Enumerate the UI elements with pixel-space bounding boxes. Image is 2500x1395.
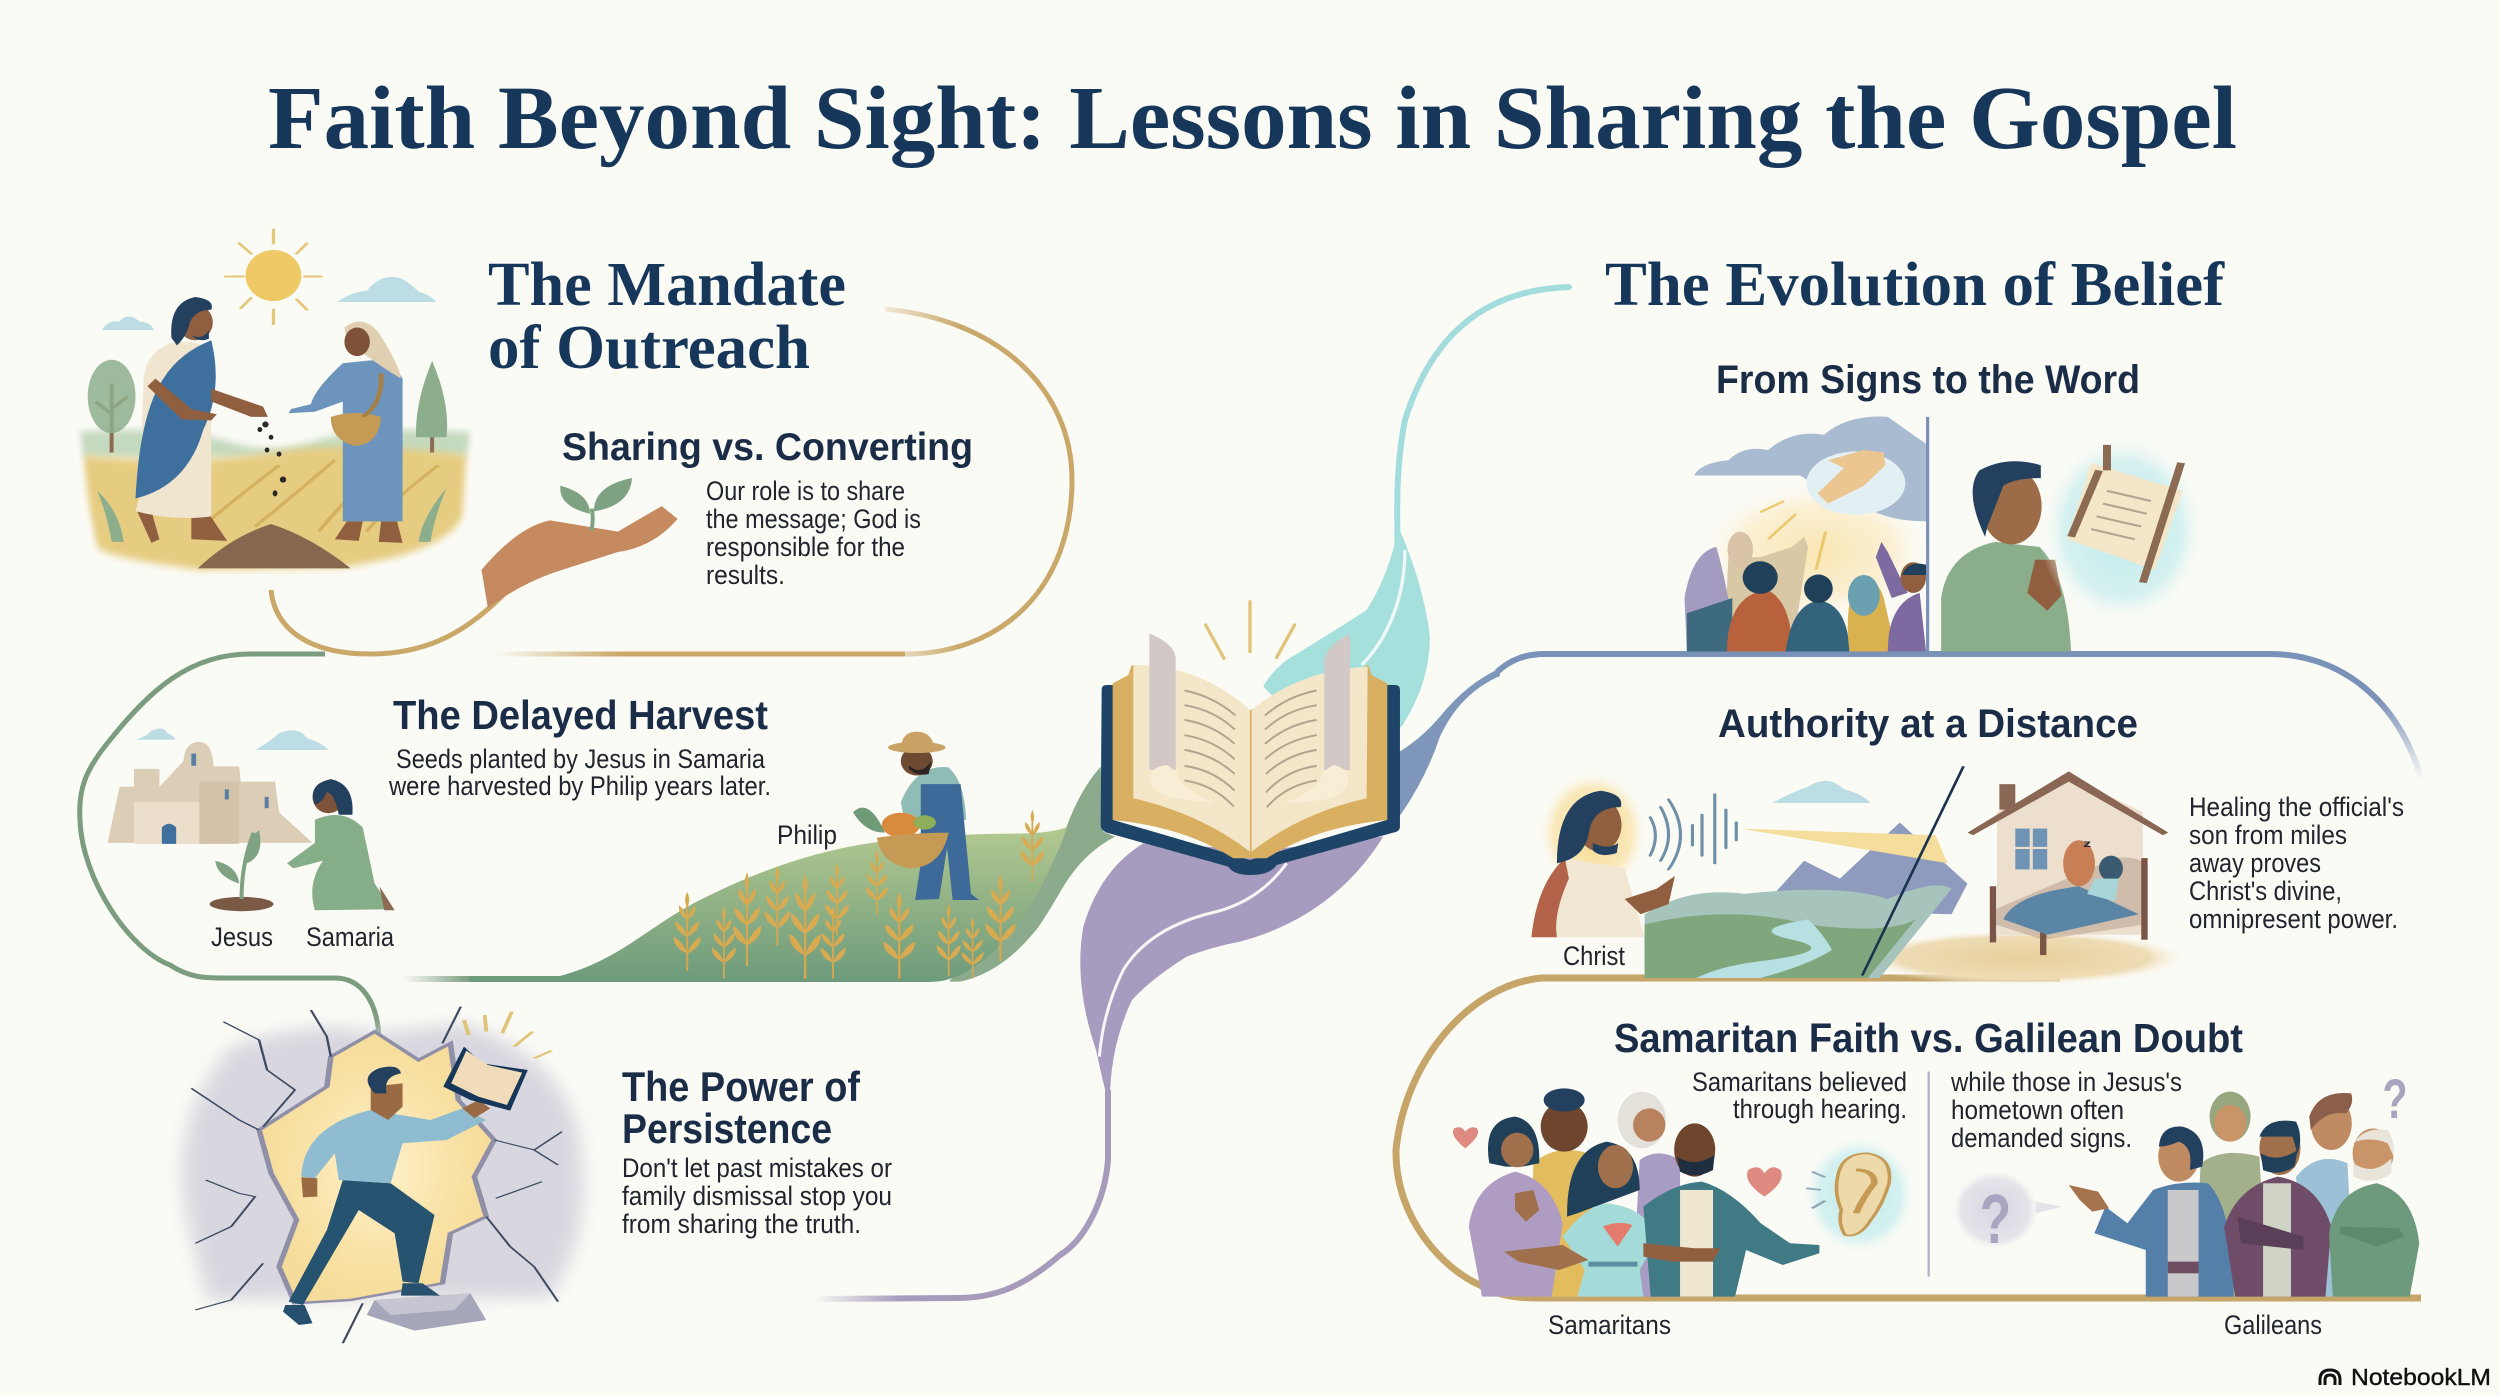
group: Samaritans [1469, 1088, 1819, 1297]
icon: question bubble: ? [1980, 1180, 2011, 1259]
light rays [1206, 602, 1295, 658]
brand: NotebookLM: NotebookLM [2351, 1364, 2491, 1390]
labels: Jesus and Samaria: Jesus [211, 922, 273, 952]
heading: The Mandate of Outreach: of Outreach [488, 314, 810, 382]
book cover [1101, 685, 1400, 875]
label: Christ: Christ [1563, 941, 1625, 971]
icons: hearts [1453, 1127, 1782, 1197]
illustration: Jesus planting in Samaria [108, 729, 395, 911]
wall [182, 1023, 583, 1300]
text block: delayed harvest body: were harvested by Philip years later. [388, 771, 771, 801]
connector: gold loop around Samaritan panel [1396, 978, 2421, 1298]
illustration: signs versus the word [1684, 417, 2207, 652]
text block: sharing body: results. [706, 560, 785, 590]
icon: trees [88, 360, 447, 453]
title: Faith Beyond Sight: Lessons in Sharing the Gospel [268, 69, 2237, 168]
icon: central open book [1101, 602, 1400, 875]
illustration: person breaking through wall [182, 1007, 583, 1343]
text block: authority body: Christ's divine, [2189, 876, 2342, 906]
text lines [1185, 691, 1316, 807]
turning page ribbons [1149, 633, 1350, 770]
wheat stalks [674, 810, 1044, 978]
icon: question mark: ? [2383, 1069, 2408, 1131]
field and hills [80, 430, 470, 570]
illustration: authority at a distance [1531, 766, 2191, 986]
icon: NotebookLM logo [2320, 1370, 2340, 1385]
icon: open book with rays [443, 1012, 552, 1111]
heading: The Evolution of Belief: The Evolution of Belief [1605, 251, 2225, 319]
glowing opening [259, 1032, 494, 1303]
divider [1927, 1072, 1930, 1277]
connector: green loop around Delayed Harvest [80, 654, 379, 1040]
crowd pointing upward [1684, 532, 1926, 652]
icon: clouds [136, 729, 328, 750]
text block: authority body: omnipresent power. [2189, 904, 2398, 934]
label: Philip: Philip [777, 820, 837, 850]
figure: man praying [1941, 461, 2071, 652]
text block: Samaritans believed: through hearing. [1733, 1094, 1907, 1124]
labels: Jesus and Samaria: Samaria [306, 922, 395, 952]
connector: gold loop around Mandate of Outreach [271, 309, 1072, 654]
subheading: From Signs to the Word: From Signs to the Word [1716, 358, 2140, 402]
icon: glowing scroll [2039, 432, 2207, 626]
page edges [1113, 665, 1387, 858]
text block: Galilean contrast: hometown often [1951, 1095, 2124, 1125]
icon: city [108, 742, 313, 844]
rock [367, 1293, 486, 1331]
text block: authority body: away proves [2189, 848, 2321, 878]
icon: question bubble [1950, 1168, 2063, 1259]
subheading: Sharing vs. Converting: Sharing vs. Converting [562, 426, 973, 469]
pages [1133, 665, 1250, 852]
labels: Samaritans and Galileans: Galileans [2224, 1310, 2322, 1340]
connector: teal ribbon to Evolution of Belief [1263, 287, 1569, 757]
text block: persistence body: family dismissal stop you [622, 1181, 892, 1211]
icon: house with sleeping son: z [2083, 838, 2091, 849]
figure: Jesus sowing [136, 297, 268, 543]
icon: sprout in soil [210, 830, 273, 911]
icon: cloud [1772, 781, 1870, 803]
labels: Samaritans and Galileans: Samaritans [1548, 1310, 1671, 1340]
connector: blue ribbon to Authority at a Distance [1397, 654, 2422, 820]
text block: authority body: Healing the official's [2189, 792, 2404, 822]
figure: woman sowing [289, 321, 403, 543]
grass tufts [97, 488, 446, 542]
heading: The Delayed Harvest: The Delayed Harvest [393, 692, 768, 738]
heading: The Mandate of Outreach: The Mandate [488, 251, 846, 319]
text block: Galilean contrast: while those in Jesus's [1950, 1067, 2182, 1097]
light rays [1760, 501, 1826, 570]
subheading: Samaritan Faith vs. Galilean Doubt: Samaritan Faith vs. Galilean Doubt [1614, 1015, 2243, 1061]
text block: delayed harvest body: Seeds planted by Jesus in Samaria [396, 744, 766, 774]
landscape [1645, 822, 2191, 986]
text block: persistence body: Don't let past mistakes or [622, 1153, 892, 1183]
icon: house with sleeping son [1967, 771, 2168, 955]
heading: The Power of Persistence: Persistence [622, 1105, 832, 1152]
figure: kneeling Jesus [287, 779, 395, 910]
illustration: Samaritans and Galileans [1453, 1069, 2419, 1297]
illustration: harvest hill ribbon [403, 732, 1115, 982]
cracks [191, 1007, 562, 1343]
seeds [257, 421, 286, 496]
divider [1926, 417, 1930, 652]
icon: cloud with hand [1694, 417, 1928, 521]
icon: sun [226, 230, 321, 324]
text block: sharing body: responsible for the [706, 532, 905, 562]
text block: sharing body: Our role is to share [706, 476, 905, 506]
sound beam [1740, 829, 1948, 863]
subheading: Authority at a Distance: Authority at a Distance [1718, 702, 2138, 746]
text block: sharing body: the message; God is [706, 504, 921, 534]
sky glow [1696, 481, 1936, 623]
text block: authority body: son from miles [2189, 820, 2347, 850]
panel: mandate of outreach illustration [80, 230, 470, 570]
text block: Samaritans believed: Samaritans believed [1692, 1067, 1907, 1097]
soil mound [198, 524, 351, 568]
icon: glowing ear [1801, 1133, 1918, 1257]
divider slash [1862, 766, 1963, 976]
icon: clouds [102, 277, 436, 330]
figure: man with raised book [283, 1067, 490, 1325]
figure: Philip [853, 732, 979, 900]
icon: hand holding sprout [482, 478, 678, 608]
text block: Galilean contrast: demanded signs. [1951, 1123, 2132, 1153]
group: Galileans [2069, 1092, 2419, 1297]
heading: The Power of Persistence: The Power of [622, 1063, 861, 1110]
text block: persistence body: from sharing the truth. [622, 1209, 861, 1239]
figure: Christ with halo [1531, 769, 1675, 937]
icon: sound waves [1650, 794, 1736, 869]
connector: purple ribbon to Power of Persistence [813, 837, 1383, 1299]
